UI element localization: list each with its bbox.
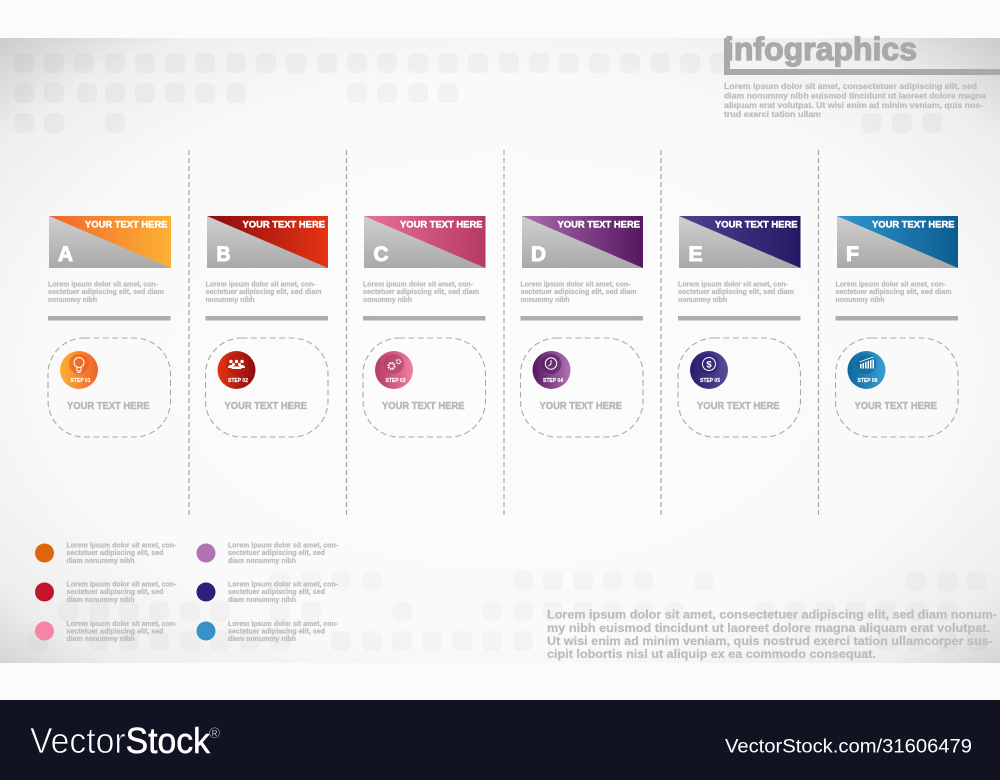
- lower margin: [0, 663, 1000, 700]
- legend item: pink: Lorem ipsum dolor sit amet, con-: [66, 621, 177, 628]
- description A: Lorem ipsum dolor sit amet, con-: [48, 282, 159, 288]
- registered mark: ®: [209, 725, 220, 742]
- description F: [836, 282, 952, 304]
- rule C: [363, 316, 486, 320]
- banner F: YOUR TEXT HERE: [872, 220, 954, 230]
- icon: bar chart: [860, 357, 874, 368]
- step card E: [678, 338, 800, 437]
- step card A: [48, 338, 170, 437]
- banner F: [837, 216, 958, 268]
- legend item: red: diam nonummy nibh: [66, 597, 134, 604]
- description A: nonummy nibh: [48, 297, 97, 304]
- description F: sectetuer adipiscing elit, sed diam: [836, 289, 952, 296]
- legend item: pink: [35, 621, 177, 643]
- description A: [48, 282, 164, 304]
- banner D: D: [531, 243, 546, 266]
- legend item: pink: diam nonummy nibh: [66, 636, 134, 643]
- column C: [363, 216, 486, 437]
- banner C: [364, 216, 486, 268]
- legend item: orange: Lorem ipsum dolor sit amet, con-: [66, 542, 177, 550]
- description F: nonummy nibh: [836, 297, 884, 304]
- description A: sectetuer adipiscing elit, sed diam: [48, 289, 164, 296]
- rule F: [836, 316, 958, 320]
- rule A: [48, 316, 170, 320]
- description F: Lorem ipsum dolor sit amet, con-: [836, 282, 946, 288]
- legend item: navy: [196, 582, 339, 604]
- bottom text block: Ut wisi enim ad minim veniam, quis nostrud exerci tation ullamcorper sus-: [547, 636, 993, 648]
- description C: sectetuer adipiscing elit, sed diam: [363, 289, 479, 296]
- banner D: [522, 216, 643, 268]
- bottom text block: my nibh euismod tincidunt ut laoreet dolore magna aliquam erat volutpat.: [547, 623, 990, 635]
- description E: sectetuer adipiscing elit, sed diam: [678, 289, 794, 296]
- banner C: YOUR TEXT HERE: [400, 220, 482, 230]
- column A: [48, 216, 171, 437]
- description B: nonummy nibh: [206, 297, 254, 304]
- legend item: navy: Lorem ipsum dolor sit amet, con-: [228, 582, 339, 588]
- legend item: violet: sectetuer adipiscing elit, sed: [228, 550, 325, 557]
- banner E: YOUR TEXT HERE: [715, 220, 798, 230]
- legend: [35, 542, 339, 643]
- legend item: pink: sectetuer adipiscing elit, sed: [66, 628, 164, 636]
- column F: [836, 216, 958, 437]
- legend item: violet: Lorem ipsum dolor sit amet, con-: [228, 542, 339, 550]
- step card F: YOUR TEXT HERE: [854, 401, 938, 412]
- description C: [363, 282, 479, 304]
- banner A: [49, 216, 171, 268]
- banner D: YOUR TEXT HERE: [558, 220, 640, 230]
- footer bar: [0, 700, 1000, 780]
- step card B: STEP 02: [228, 378, 248, 384]
- description D: [520, 282, 636, 304]
- step card E: STEP 05: [700, 378, 720, 384]
- step card C: STEP 03: [386, 378, 406, 384]
- step card C: YOUR TEXT HERE: [382, 401, 465, 412]
- banner B: YOUR TEXT HERE: [242, 220, 325, 230]
- banner A: YOUR TEXT HERE: [85, 220, 168, 230]
- legend item: violet: [196, 542, 339, 565]
- legend item: red: [35, 582, 177, 604]
- description B: Lorem ipsum dolor sit amet, con-: [206, 282, 316, 288]
- step card E: YOUR TEXT HERE: [697, 401, 780, 412]
- bottom text block: Lorem ipsum dolor sit amet, consectetuer adipiscing elit, sed diam nonum-: [547, 610, 997, 622]
- intro text: Lorem ipsum dolor sit amet, consectetuer adipiscing elit, sed: [724, 82, 977, 91]
- description E: [678, 282, 794, 304]
- banner E: [679, 216, 800, 268]
- step card B: YOUR TEXT HERE: [224, 401, 308, 412]
- legend item: orange: sectetuer adipiscing elit, sed: [66, 550, 164, 557]
- banner B: B: [216, 243, 230, 266]
- legend item: navy: diam nonummy nibh: [228, 597, 296, 604]
- banner E: E: [688, 243, 702, 266]
- description E: nonummy nibh: [678, 297, 727, 304]
- step card F: [836, 338, 958, 437]
- intro text: aliquam erat volutpat. Ut wisi enim ad minim veniam, quis nos-: [724, 101, 983, 110]
- step card D: [520, 338, 643, 437]
- description D: Lorem ipsum dolor sit amet, con-: [520, 282, 631, 288]
- icon: gears: [388, 360, 400, 369]
- icon: dollar coin: $: [706, 360, 712, 370]
- description C: Lorem ipsum dolor sit amet, con-: [363, 282, 474, 288]
- legend item: blue: Lorem ipsum dolor sit amet, con-: [228, 621, 339, 628]
- title block: [724, 31, 1000, 119]
- icon: people: [228, 360, 245, 369]
- rule B: [206, 316, 328, 320]
- step card A: YOUR TEXT HERE: [67, 401, 150, 412]
- step card A: STEP 01: [70, 378, 90, 384]
- step card B: [206, 338, 328, 437]
- legend item: red: sectetuer adipiscing elit, sed: [66, 589, 164, 596]
- intro text: [724, 82, 986, 119]
- intro text: trud exerci tation ullam: [724, 110, 821, 119]
- legend item: red: Lorem ipsum dolor sit amet, con-: [66, 582, 177, 588]
- description D: sectetuer adipiscing elit, sed diam: [520, 289, 636, 296]
- column E: [678, 216, 800, 437]
- banner C: C: [374, 243, 388, 266]
- step card D: YOUR TEXT HERE: [540, 401, 623, 412]
- banner F: F: [846, 243, 859, 266]
- rule D: [520, 316, 643, 320]
- legend item: blue: diam nonummy nibh: [228, 636, 296, 643]
- description B: [206, 282, 322, 304]
- title: infographics: [725, 31, 917, 67]
- legend item: orange: diam nonummy nibh: [66, 558, 134, 565]
- description C: nonummy nibh: [363, 297, 412, 304]
- banner B: [207, 216, 328, 268]
- title frame: [724, 38, 1000, 75]
- icon: light bulb: [74, 358, 84, 372]
- column dividers: [189, 150, 818, 516]
- footer id: VectorStock.com/31606479: [725, 737, 972, 758]
- legend item: blue: sectetuer adipiscing elit, sed: [228, 628, 325, 636]
- banner A: A: [58, 243, 73, 266]
- description B: sectetuer adipiscing elit, sed diam: [206, 289, 322, 296]
- bottom text block: cipit lobortis nisl ut aliquip ex ea commodo consequat.: [547, 649, 876, 661]
- step card F: STEP 06: [858, 378, 878, 384]
- rule E: [678, 316, 800, 320]
- legend item: violet: diam nonummy nibh: [228, 558, 296, 565]
- icon: clock: [545, 358, 557, 369]
- top margin: [0, 0, 1000, 38]
- column B: [206, 216, 328, 437]
- description D: nonummy nibh: [520, 297, 570, 304]
- intro text: diam nonummy nibh euismod tincidunt ut laoreet dolore magna: [724, 92, 986, 100]
- legend item: orange: [35, 542, 177, 565]
- footer logo: VectorStock: [30, 720, 211, 761]
- legend item: blue: [196, 621, 339, 643]
- step card D: STEP 04: [543, 378, 563, 384]
- description E: Lorem ipsum dolor sit amet, con-: [678, 282, 789, 288]
- step card C: [363, 338, 486, 437]
- legend item: navy: sectetuer adipiscing elit, sed: [228, 589, 325, 596]
- bottom text block: [547, 610, 997, 661]
- column D: [520, 216, 643, 437]
